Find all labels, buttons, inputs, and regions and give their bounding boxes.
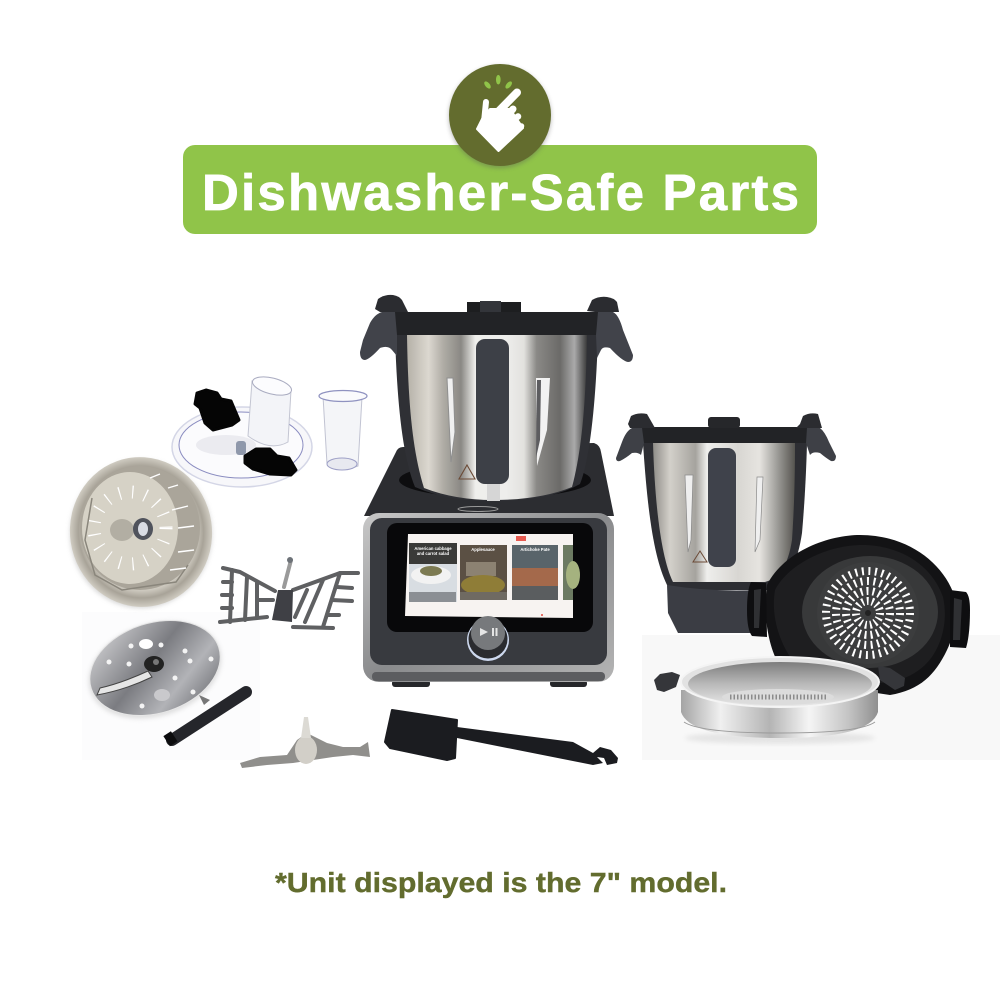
recipe card 2	[460, 545, 507, 600]
steel drive collar	[487, 484, 500, 501]
feet	[392, 680, 430, 687]
logo swirl	[458, 506, 498, 512]
right handle	[806, 428, 836, 461]
warning triangle	[693, 551, 707, 562]
rim	[395, 312, 599, 335]
left handle	[616, 428, 644, 461]
panel: photo backdrop for disc	[82, 612, 260, 760]
part: black rod	[163, 692, 246, 746]
lid knob	[236, 441, 246, 455]
lid cap	[467, 302, 521, 312]
feed tube	[248, 381, 291, 446]
left grip	[747, 582, 767, 637]
steel steamer tray	[654, 657, 905, 744]
heat warning triangle	[459, 465, 475, 479]
front panel frame	[363, 513, 614, 682]
part: clear lid with pusher	[172, 373, 312, 487]
part: steel basket	[60, 448, 222, 616]
rim	[642, 427, 807, 443]
lid cap	[708, 417, 740, 428]
right grip	[950, 590, 970, 648]
steamer dish	[747, 535, 970, 695]
recipe card 1	[409, 543, 457, 602]
right handle	[596, 312, 633, 362]
title banner	[183, 145, 817, 234]
icon: tapping hand badge	[449, 64, 551, 168]
part: small blade	[240, 717, 370, 768]
main unit: food processor	[360, 295, 633, 687]
base top	[364, 443, 614, 516]
footnote: *Unit displayed is the 7" model.	[275, 867, 727, 898]
recipe card 1: and carrot salad	[417, 551, 450, 556]
recipe card 4	[563, 545, 580, 600]
bowl: dark outer	[395, 335, 598, 501]
bowl slots	[447, 378, 455, 462]
left handle	[360, 312, 397, 360]
black clip lower	[245, 449, 296, 475]
handle	[708, 448, 736, 567]
part: pusher tube	[319, 390, 367, 470]
part: slicing disc	[76, 604, 234, 735]
slots	[685, 475, 693, 552]
strainer	[802, 556, 938, 668]
recipe card 3	[512, 545, 558, 600]
touch screen	[405, 534, 580, 618]
bowl: steel	[407, 335, 587, 500]
recipe card 1: American cabbage	[414, 546, 452, 551]
part: kneading beater	[220, 557, 358, 628]
panel: photo backdrop for steamer	[642, 635, 1000, 760]
bowl handle	[476, 339, 509, 484]
black clip upper	[195, 390, 239, 430]
part: spatula	[385, 710, 618, 765]
recipe card 2: Applesauce	[471, 547, 495, 552]
tray handles	[654, 672, 680, 692]
recipe card 3: Artichoke Pate	[520, 547, 550, 552]
title: Dishwasher-Safe Parts	[202, 164, 799, 221]
bowl base	[667, 585, 757, 633]
secondary bowl	[616, 413, 836, 633]
control knob	[467, 616, 509, 661]
